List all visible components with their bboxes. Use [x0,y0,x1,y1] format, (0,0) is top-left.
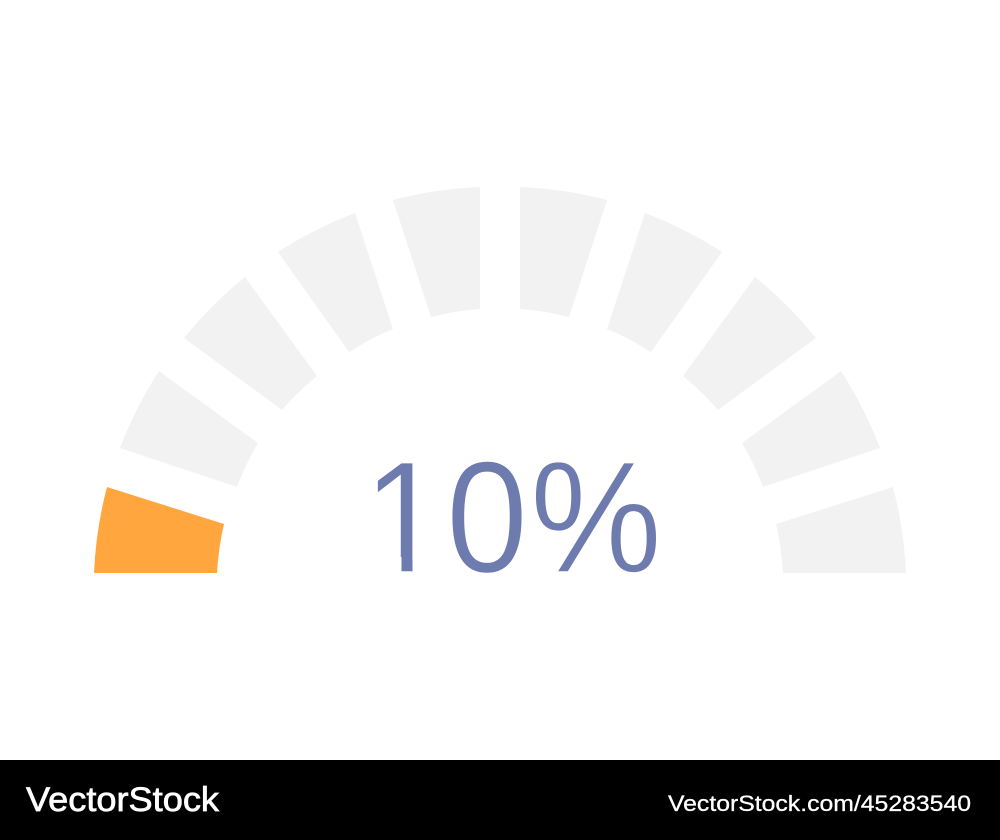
gauge segment 2 [120,371,258,487]
gauge segment 10 [776,487,906,573]
footer image URL: VectorStock.com/45283540 [668,791,971,816]
gauge segment 3 [184,277,317,410]
gauge segment 8 [683,277,816,410]
footer bar [0,760,1000,840]
semicircular gauge [94,187,906,573]
gauge segment 7 [607,213,722,352]
gauge segment 6 [520,187,607,317]
percentage value [363,428,662,606]
percentage value: 0 [446,428,528,606]
footer brand name: VectorStock [26,781,220,819]
gauge segment 4 [278,213,393,352]
gauge segment 5 [393,187,480,317]
percentage value: 1 [363,428,445,606]
percentage value: % [530,428,662,606]
gauge segment 1: active orange [94,487,224,573]
gauge segment 9 [742,371,880,487]
